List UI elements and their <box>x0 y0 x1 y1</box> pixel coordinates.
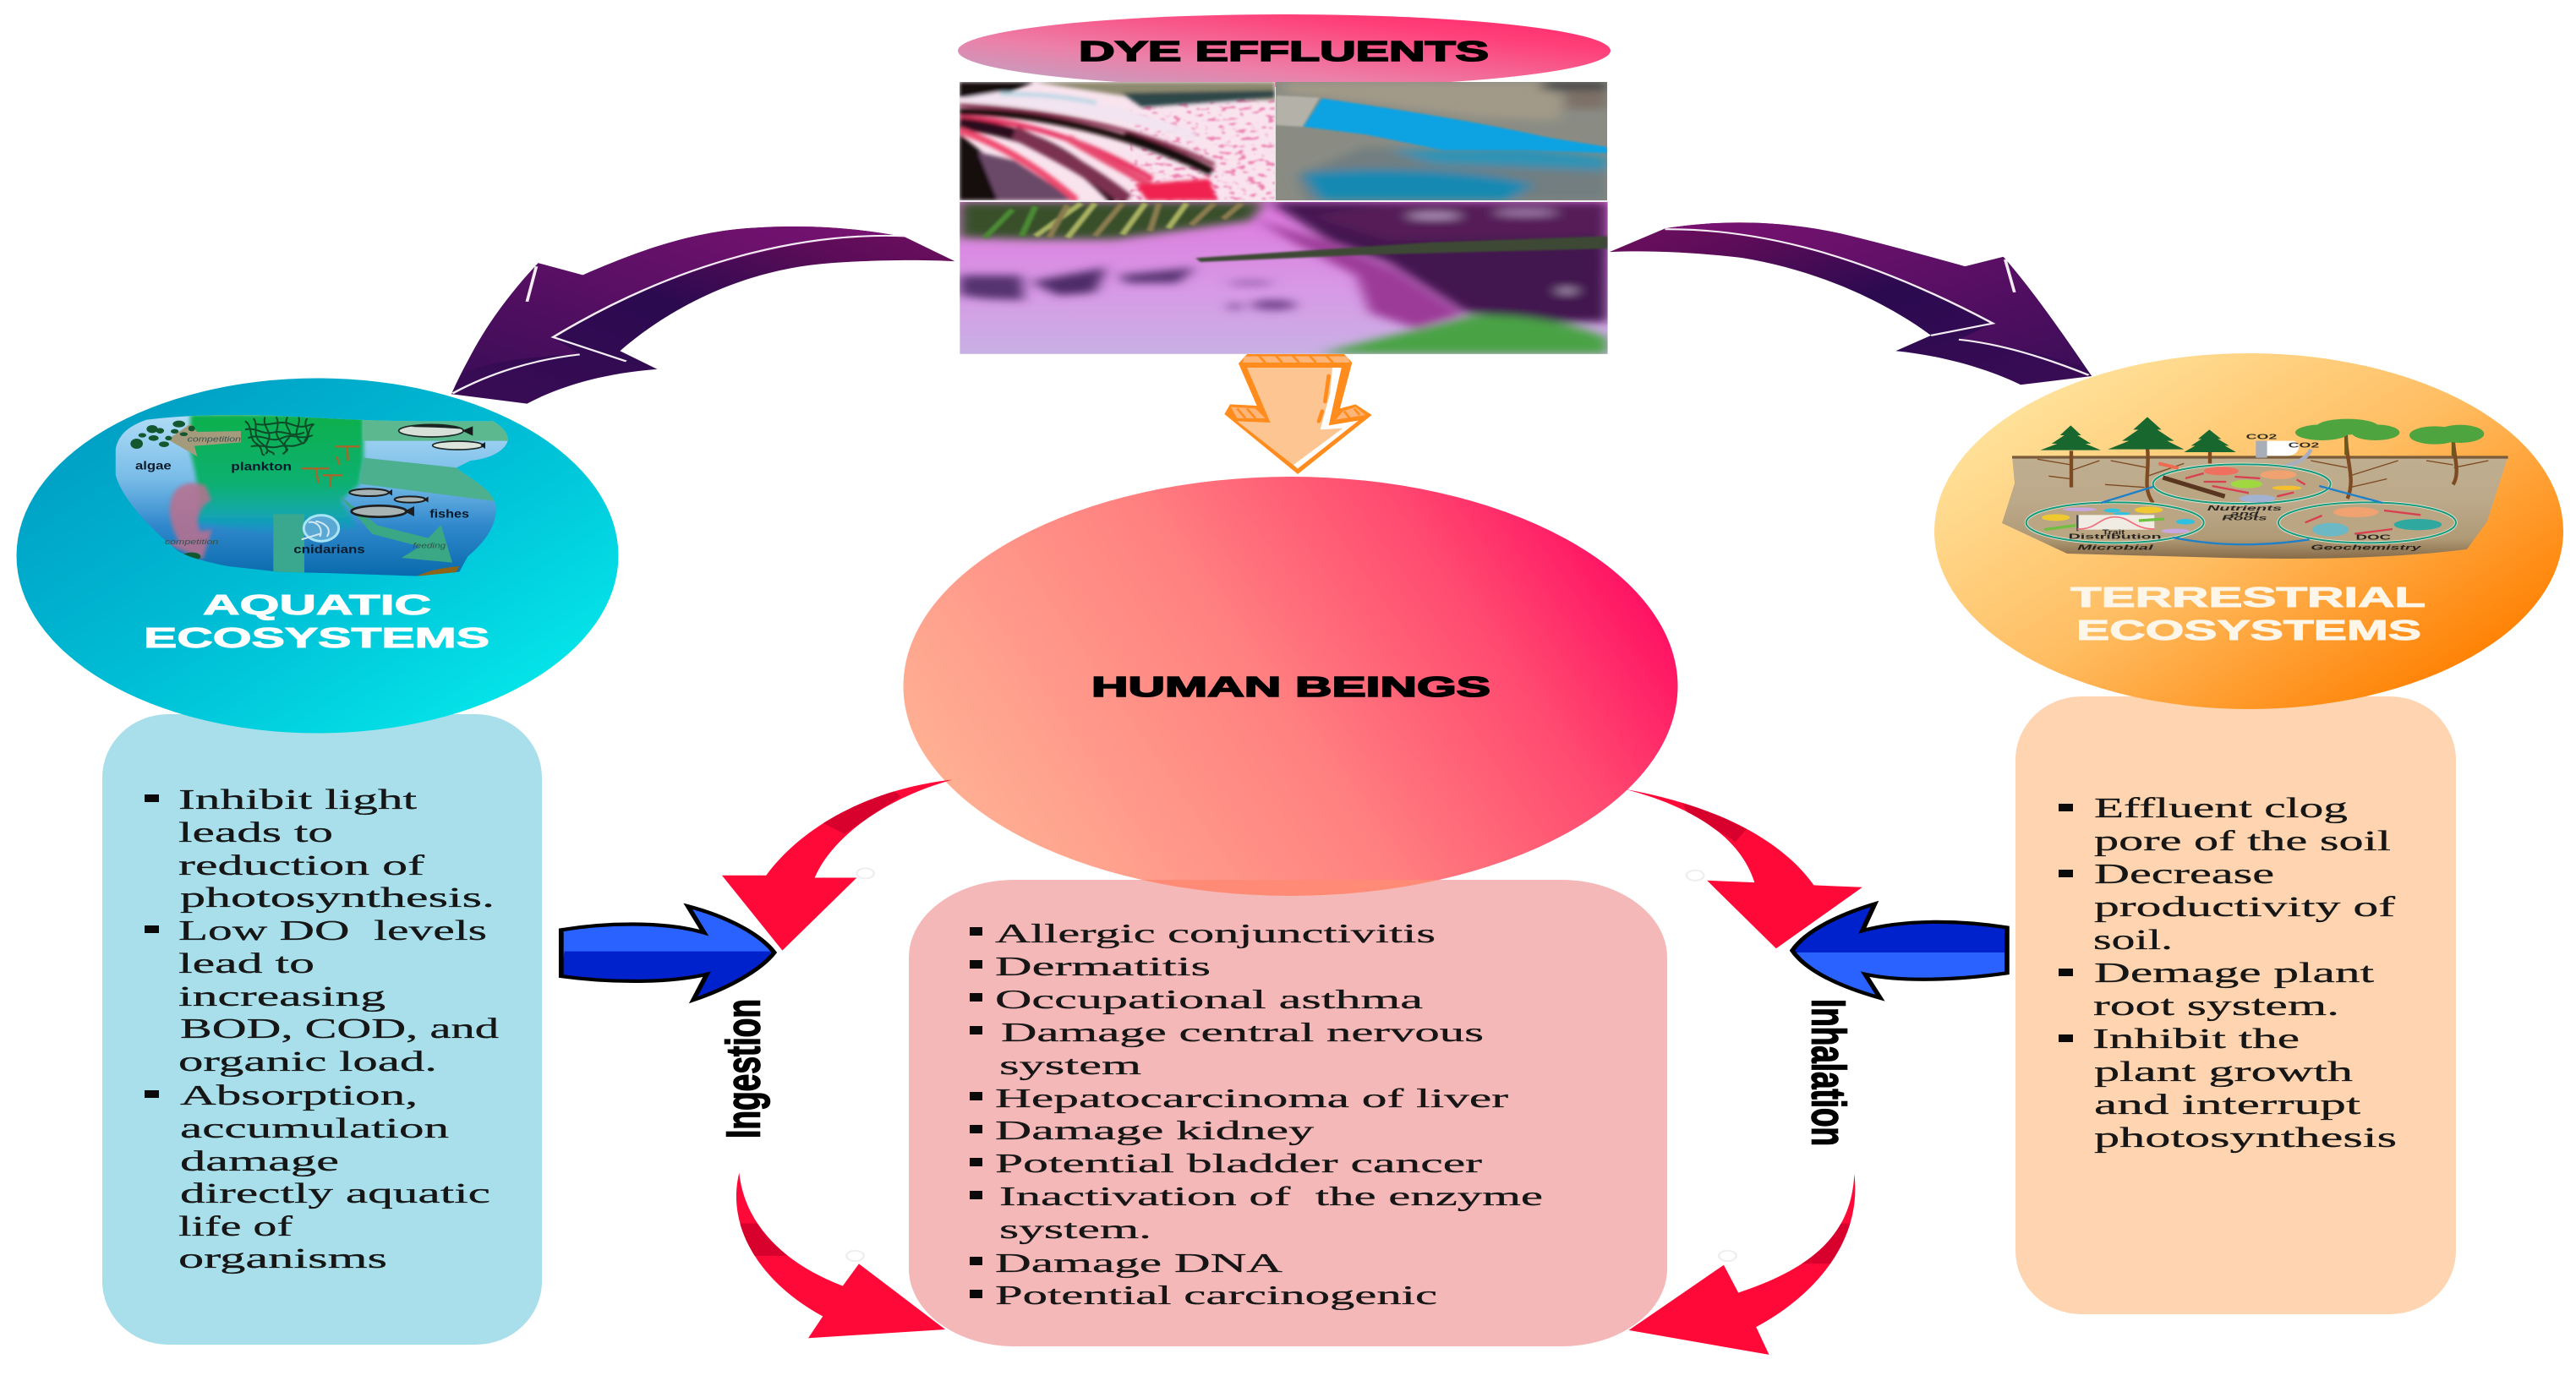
aquatic ecosystems circle <box>17 379 619 734</box>
text: human health effects list: Potential bladder cancer <box>995 1148 1483 1178</box>
text: terrestrial effects list: plant growth <box>2094 1056 2353 1088</box>
header ellipse <box>958 14 1611 87</box>
soil and forest illustration: Nutrients <box>2207 504 2283 512</box>
heading: human beings: HUMAN BEINGS <box>1091 672 1490 703</box>
text: aquatic effects list: photosynthesis. <box>180 882 495 914</box>
text: human health effects list: Occupational asthma <box>995 984 1423 1014</box>
panel: human health impacts <box>909 880 1667 1346</box>
text: terrestrial effects list: Demage plant <box>2094 958 2375 989</box>
illustration labels: algae <box>135 459 172 472</box>
photo divider <box>960 200 1607 202</box>
circle <box>1934 353 2563 709</box>
photos of dye effluents <box>960 82 1608 354</box>
illustration labels: feeding <box>413 541 446 549</box>
text: aquatic effects list: BOD, COD, and <box>180 1013 499 1045</box>
soil and forest illustration: Microbial <box>2077 543 2154 551</box>
text: human health effects list: Hepatocarcinoma of liver <box>995 1083 1509 1113</box>
heading: aquatic ecosystems <box>144 589 489 653</box>
bullet markers <box>970 927 982 1298</box>
illustration labels <box>135 434 469 555</box>
illustration labels: fishes <box>429 506 469 520</box>
illustration labels: cnidarians <box>293 542 365 555</box>
text: human health effects list <box>995 918 1543 1310</box>
label: ingestion: Ingestion <box>717 999 771 1138</box>
panel: terrestrial impacts <box>2015 696 2456 1314</box>
blue arrow: inhalation <box>1792 903 2007 998</box>
blue arrow: ingestion <box>561 906 774 1000</box>
text: terrestrial effects list: soil. <box>2093 925 2173 956</box>
panel: aquatic impacts <box>102 714 542 1345</box>
text: terrestrial effects list: Effluent clog <box>2094 793 2348 824</box>
heading: terrestrial ecosystems: TERRESTRIAL <box>2070 581 2426 613</box>
text: human health effects list: Dermatitis <box>995 951 1211 981</box>
human beings ellipse <box>903 477 1677 896</box>
panel background <box>2015 696 2456 1314</box>
heading: aquatic ecosystems: AQUATIC <box>203 589 431 620</box>
text: aquatic effects list: lead to <box>178 948 314 980</box>
ingestion pathway arrows <box>561 779 952 1338</box>
text: human health effects list: Damage kidney <box>995 1115 1314 1145</box>
text: aquatic effects list: organisms <box>178 1243 387 1275</box>
panel background <box>102 714 542 1345</box>
bullet markers <box>2059 804 2073 1042</box>
text: terrestrial effects list: Decrease <box>2094 859 2274 890</box>
heading: dye effluents: DYE EFFLUENTS <box>1079 36 1489 68</box>
text: aquatic effects list: directly aquatic <box>180 1178 490 1209</box>
left purple arrow <box>451 227 954 404</box>
red arrow: to human health panel <box>723 1173 945 1338</box>
text: terrestrial effects list: photosynthesis <box>2094 1122 2397 1154</box>
photo: purple effluent <box>960 202 1608 354</box>
text: aquatic effects list: organic load. <box>178 1046 437 1078</box>
text: terrestrial effects list: and interrupt <box>2094 1089 2361 1121</box>
right purple arrow <box>1610 222 2092 385</box>
red arrow: to human health panel <box>1629 1174 1870 1355</box>
photo: blue effluent <box>1276 82 1607 200</box>
heading: aquatic ecosystems: ECOSYSTEMS <box>144 622 489 653</box>
heading: terrestrial ecosystems: ECOSYSTEMS <box>2076 614 2421 646</box>
ellipse overlap <box>1142 880 1439 896</box>
soil and forest illustration <box>2002 417 2508 559</box>
aquatic food web illustration <box>110 410 516 579</box>
red arrow: to inhalation <box>1625 789 1862 948</box>
dye effluents header <box>958 14 1611 87</box>
text: human health effects list: Inactivation of the enzyme <box>999 1181 1543 1211</box>
soil and forest illustration: Geochemistry <box>2311 543 2423 551</box>
soil and forest illustration: CO2 <box>2289 440 2320 449</box>
soil and forest illustration: Roots <box>2222 513 2267 521</box>
text: aquatic effects list: Inhibit light <box>178 784 418 816</box>
panel background <box>909 880 1667 1346</box>
text: human health effects list: Damage central nervous <box>1001 1017 1484 1047</box>
text: aquatic effects list: reduction of <box>178 850 425 882</box>
heading: terrestrial ecosystems <box>2070 581 2426 646</box>
red arrow: to ingestion <box>722 779 952 951</box>
text: terrestrial effects list: productivity of <box>2094 892 2396 923</box>
text: human health effects list: Allergic conjunctivitis <box>995 918 1436 948</box>
text: aquatic effects list <box>178 784 499 1275</box>
text: human health effects list: Damage DNA <box>995 1247 1283 1278</box>
inhalation pathway arrows <box>1625 789 2007 1355</box>
text: terrestrial effects list: root system. <box>2093 991 2339 1022</box>
label: inhalation: Inhalation <box>1802 999 1856 1146</box>
text: human health effects list: system. <box>999 1214 1151 1244</box>
text: terrestrial effects list: Inhibit the <box>2092 1023 2300 1055</box>
text: terrestrial effects list <box>2092 793 2397 1154</box>
text: human health effects list: system <box>999 1050 1141 1080</box>
text: aquatic effects list: damage <box>180 1146 339 1177</box>
soil and forest illustration: CO2 <box>2246 432 2278 440</box>
text: human health effects list: Potential carcinogenic <box>995 1280 1437 1310</box>
soil and forest illustration: DOC <box>2355 533 2393 542</box>
illustration labels: plankton <box>231 460 292 473</box>
soil and forest illustration: and <box>2230 510 2260 518</box>
orange arrow down <box>1224 354 1372 474</box>
text: aquatic effects list: life of <box>178 1211 293 1242</box>
text: aquatic effects list: leads to <box>178 817 333 849</box>
circle <box>17 379 619 734</box>
soil and forest illustration: Trait <box>2103 528 2125 537</box>
text: terrestrial effects list: pore of the soil <box>2094 826 2391 857</box>
text: aquatic effects list: accumulation <box>180 1113 449 1144</box>
text: aquatic effects list: Low DO levels <box>178 915 487 947</box>
text: aquatic effects list: Absorption, <box>180 1080 418 1111</box>
bullet markers <box>145 794 159 1098</box>
illustration labels: competition <box>165 538 218 546</box>
soil and forest illustration: Distribution <box>2069 532 2162 541</box>
photo: red effluent <box>960 82 1275 200</box>
terrestrial ecosystems circle <box>1934 353 2563 709</box>
text: aquatic effects list: increasing <box>178 981 386 1013</box>
illustration labels: competition <box>188 434 241 443</box>
